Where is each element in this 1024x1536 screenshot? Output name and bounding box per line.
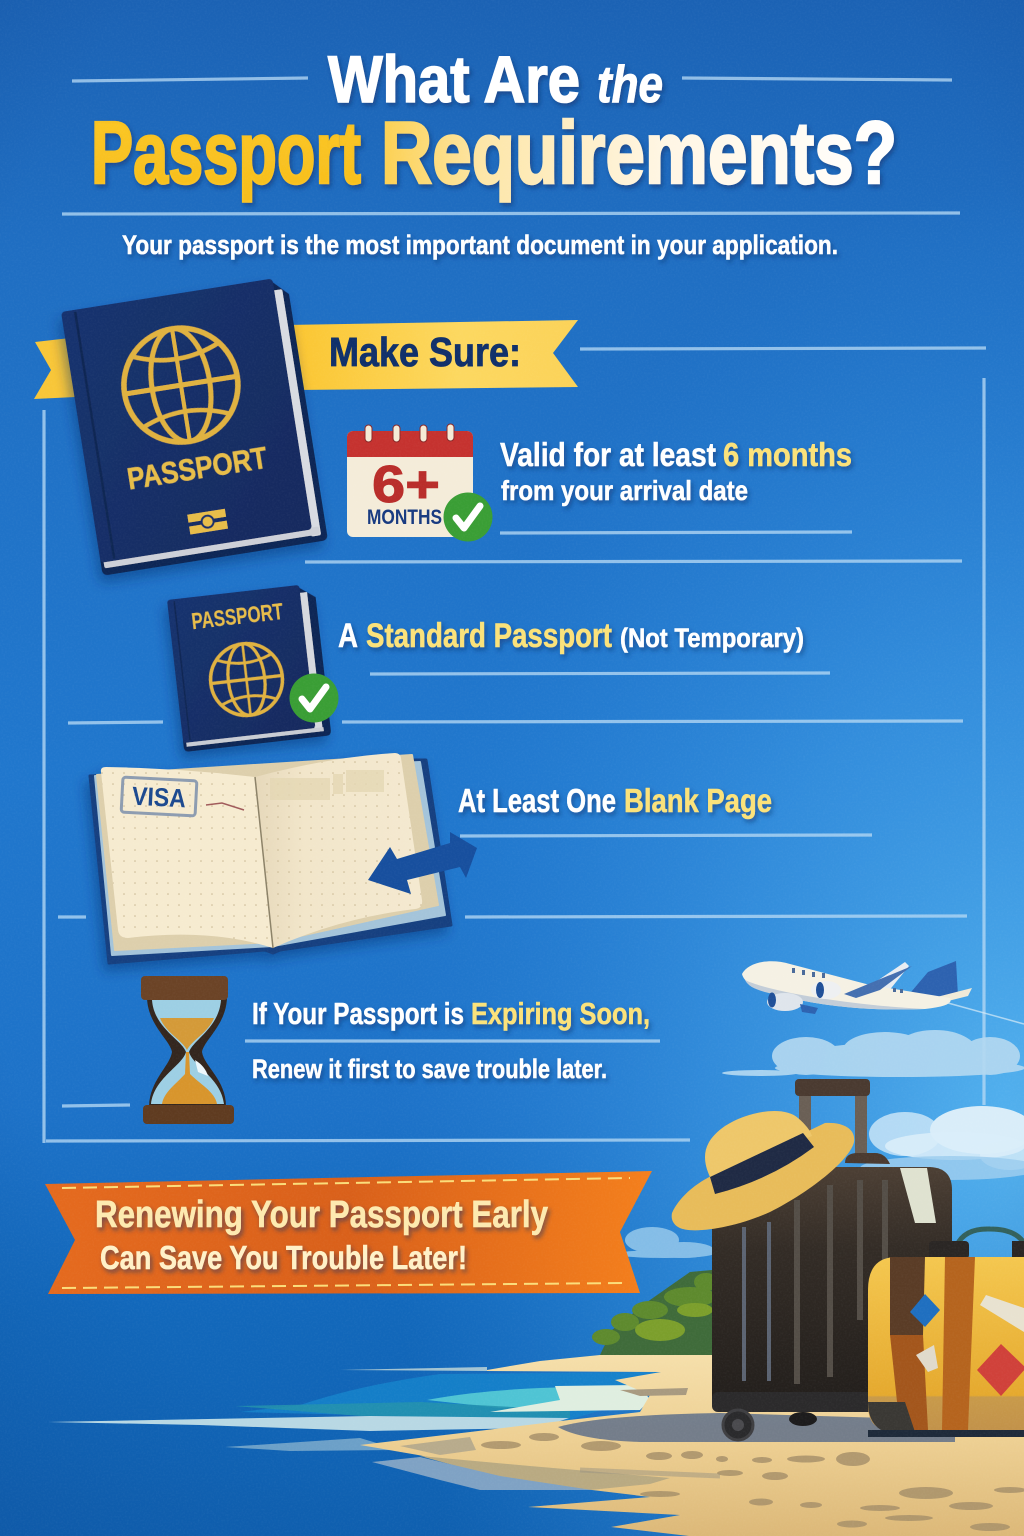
black suitcase [712,1079,952,1440]
icon: double arrow [368,832,477,894]
six plus: 6+ [372,456,440,514]
item 4: expiring text: If Your Passport is [252,996,464,1031]
luggage [672,1079,1024,1440]
passport chip [187,509,228,534]
item 1: validity text: Valid for at least [500,436,716,473]
hat band [710,1133,814,1194]
item 2: small passport icon [167,583,338,752]
item 2: standard passport text: A [338,617,358,655]
cloud middle [869,1106,1024,1170]
caps [141,976,228,1000]
item 3: blank page text: At Least One [458,782,616,819]
yellow suitcase [868,1229,1024,1437]
hat brim [672,1123,854,1230]
beach sand [340,1348,1024,1536]
title line 1: the [597,56,663,114]
small passport label: PASSPORT [190,598,284,634]
item 4: expiring text: Expiring Soon, [471,996,650,1031]
ribbon tail [34,338,76,399]
banner text: Renewing Your Passport Early [95,1194,548,1236]
item 3: open passport book [90,753,451,963]
item 1: validity text [500,436,852,506]
icon: airplane [742,961,1024,1024]
item 4: hourglass icon [141,976,234,1124]
banner stitching [62,1178,630,1288]
check badge [444,492,492,542]
title line 2 [91,103,897,202]
item 2: standard passport text [338,617,804,655]
stickers [910,1294,940,1327]
check badge [290,674,338,722]
orange banner [45,1171,652,1294]
banner text [95,1194,548,1276]
luggage shadow [558,1413,955,1442]
frame and divider lines [44,78,986,1143]
banner text: Can Save You Trouble Later! [100,1239,467,1276]
clouds [617,1030,1024,1258]
right page [255,753,422,948]
item 1: validity text: from your arrival date [501,475,748,506]
item 4: expiring text [252,996,650,1084]
icon: large passport [61,276,328,576]
shoreline water [48,1372,661,1451]
months label: MONTHS [367,506,442,529]
straw hat [672,1111,854,1230]
ribbon band [285,320,578,390]
visa stamp: VISA [131,781,187,813]
tree line [592,1270,718,1355]
subtitle: Your passport is the most important document in your application. [122,230,838,260]
item 3: blank page text: Blank Page [624,782,772,819]
item 1: calendar icon [347,424,492,542]
item 4: expiring text: Renew it first to save trouble later. [252,1054,607,1084]
ribbon label: Make Sure: [329,329,521,375]
title line 1: What Are [328,42,580,116]
item 3: blank page text [458,782,772,819]
small passport globe [207,640,286,719]
title line 2: Passport [91,103,361,202]
title line 2: Requirements? [381,103,897,202]
passport globe [116,320,246,450]
item 1: validity text: 6 months [723,436,852,473]
make sure ribbon [34,320,578,399]
passport label: PASSPORT [125,440,270,496]
item 2: standard passport text: Standard Passport [366,617,612,655]
item 2: standard passport text: (Not Temporary) [620,623,804,653]
cloud upper [722,1030,1024,1077]
left page [101,767,273,948]
cloud lower [617,1227,714,1258]
hat crown [705,1111,812,1177]
wet sand [400,1437,476,1455]
sand [160,1018,214,1050]
title [91,42,897,202]
